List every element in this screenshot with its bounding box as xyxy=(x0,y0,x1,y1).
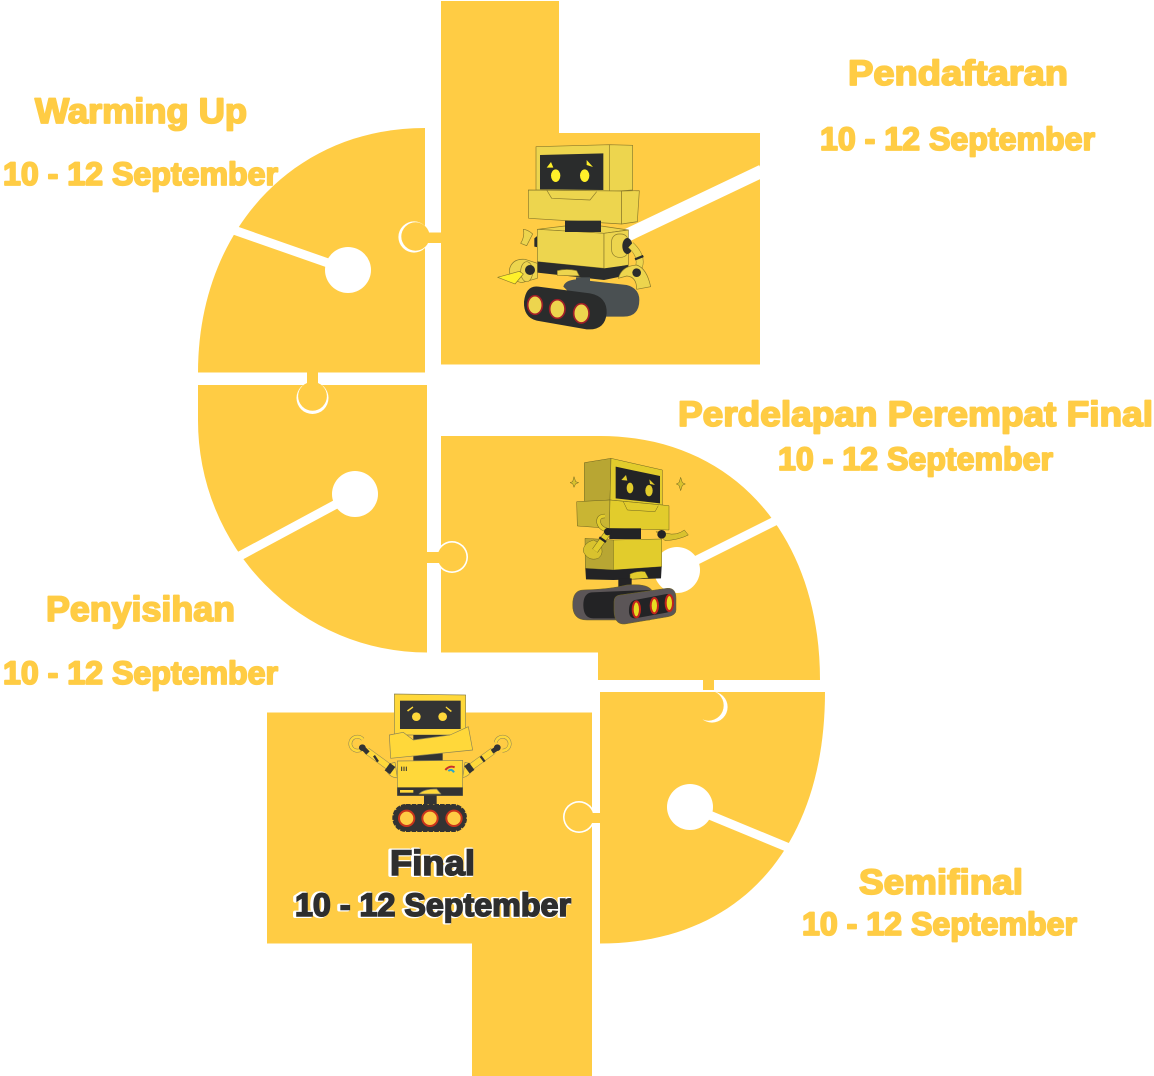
robot: perdelapan xyxy=(570,458,688,624)
puzzle piece: final with stem xyxy=(267,712,600,1076)
heading: warming up xyxy=(3,92,278,192)
heading: semifinal: 10 - 12 September xyxy=(802,906,1077,942)
heading: final: Final xyxy=(388,844,474,883)
heading: perdelapan perempat final: Perdelapan Perempat Final xyxy=(678,395,1153,434)
heading: final: Final xyxy=(390,844,475,883)
heading: final: 10 - 12 September xyxy=(295,887,571,923)
heading: penyisihan xyxy=(3,590,278,691)
heading: warming up: Warming Up xyxy=(35,92,247,131)
robot: pendaftaran xyxy=(498,145,651,329)
heading: perdelapan perempat final: 10 - 12 September xyxy=(778,441,1053,477)
heading: semifinal: Semifinal xyxy=(859,863,1023,902)
puzzle piece: penyisihan xyxy=(198,372,427,653)
heading: perdelapan perempat final xyxy=(678,395,1153,477)
puzzle piece: top right with stem xyxy=(441,1,762,364)
heading: pendaftaran xyxy=(820,54,1095,157)
heading: penyisihan: 10 - 12 September xyxy=(3,655,278,691)
heading: final xyxy=(293,844,571,923)
heading: pendaftaran: Pendaftaran xyxy=(848,54,1068,93)
puzzle piece: warming up xyxy=(198,128,442,372)
puzzle piece: perdelapan perempat final xyxy=(426,436,820,680)
heading: final: 10 - 12 September xyxy=(293,887,570,923)
heading: penyisihan: Penyisihan xyxy=(46,590,235,629)
robot: final xyxy=(348,694,511,831)
puzzle piece: semifinal xyxy=(600,680,825,944)
heading: semifinal xyxy=(802,863,1077,942)
heading: warming up: 10 - 12 September xyxy=(3,156,278,192)
heading: pendaftaran: 10 - 12 September xyxy=(820,121,1095,157)
